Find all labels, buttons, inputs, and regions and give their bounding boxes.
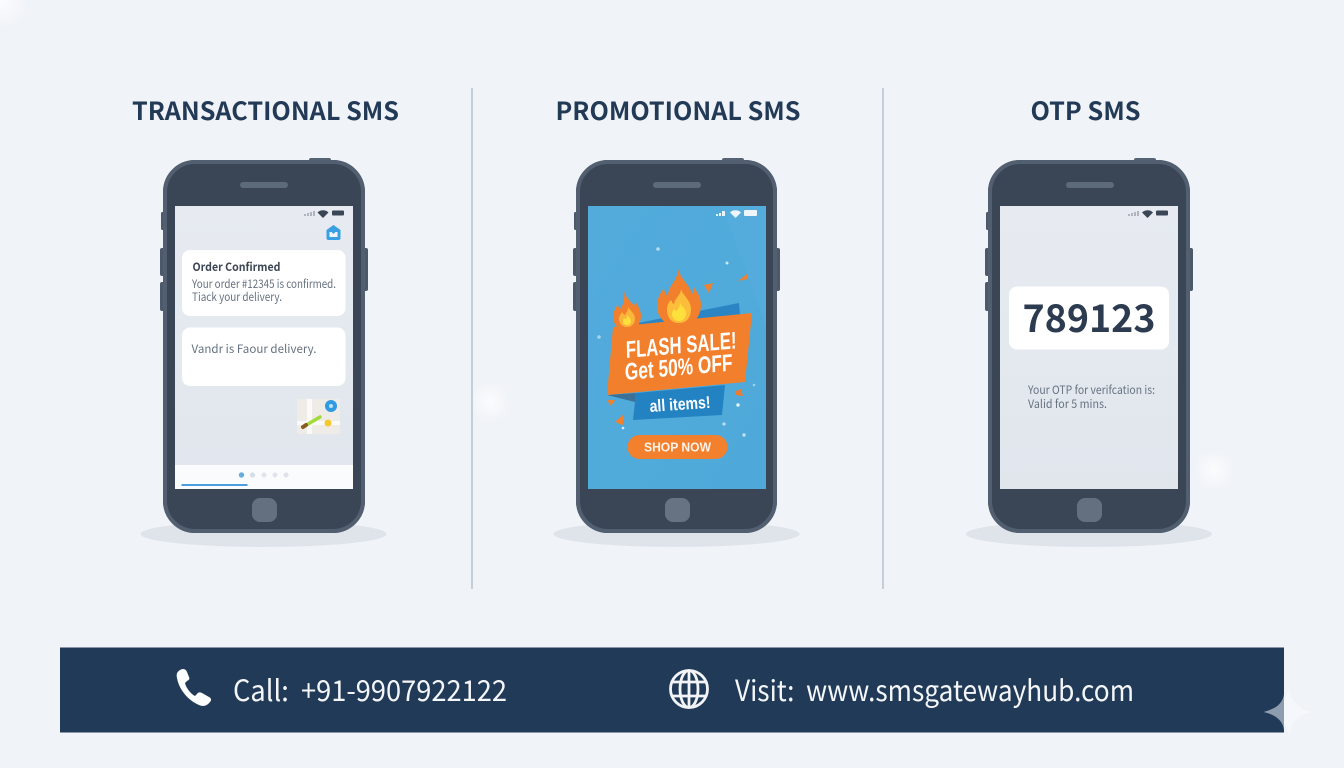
- phone shadow: [554, 521, 800, 547]
- status bar icons: [304, 210, 344, 218]
- button: shop now: SHOP NOW: [644, 440, 712, 454]
- call text: Call: +91-9907922122: [233, 668, 507, 710]
- promo text: all items!: [649, 393, 711, 416]
- panel: transactional SMS: [132, 92, 399, 547]
- button: shop now: [628, 435, 728, 459]
- status bar icons: [716, 210, 757, 218]
- icon: inbox badge: [326, 225, 340, 240]
- message card: order confirmed: [182, 250, 346, 316]
- message card: delivery: [182, 328, 346, 386]
- phone shadow: [140, 521, 386, 547]
- screen: [175, 206, 353, 489]
- phone body: [573, 158, 780, 533]
- carousel dots: [182, 472, 288, 486]
- OTP message: Valid for 5 mins.: [1028, 396, 1107, 412]
- ribbon: orange flash sale: [607, 313, 752, 395]
- phone body: [160, 158, 368, 533]
- phone body: [985, 158, 1193, 533]
- heading: promotional: PROMOTIONAL SMS: [556, 92, 800, 128]
- icon: phone: [177, 669, 211, 706]
- ribbon back: blue lower: [633, 385, 725, 420]
- panel: promotional SMS: [554, 92, 800, 547]
- decorative sparkle: [1264, 687, 1311, 736]
- ribbon back: blue upper: [638, 303, 740, 327]
- OTP message: [1027, 382, 1155, 412]
- icon: delivery map: [297, 399, 340, 434]
- confetti: [597, 247, 755, 437]
- screen: [1000, 206, 1178, 489]
- phone shadow: [966, 521, 1212, 547]
- message card: order confirmed: Order Confirmed: [192, 259, 280, 275]
- message card: order confirmed: Tiack your delivery.: [192, 289, 282, 305]
- heading: transactional: TRANSACTIONAL SMS: [132, 92, 399, 128]
- contact bar: [60, 648, 1284, 732]
- OTP message: Your OTP for verifcation is:: [1027, 382, 1155, 398]
- message card: delivery: Vandr is Faour delivery.: [192, 341, 316, 357]
- status bar icons: [1128, 210, 1168, 218]
- screen: [588, 206, 766, 489]
- message card: order confirmed: Your order #12345 is confirmed.: [191, 276, 336, 292]
- flame: small: [613, 291, 641, 331]
- icon: globe: [670, 670, 708, 708]
- promo text: [625, 327, 737, 416]
- visit text: Visit: www.smsgatewayhub.com: [735, 668, 1134, 710]
- promo text: FLASH SALE!: [626, 327, 737, 364]
- OTP code card: 789123: [1022, 288, 1156, 343]
- heading: OTP: OTP SMS: [1030, 92, 1140, 128]
- ribbon fold: [607, 393, 636, 402]
- panel: OTP SMS: [966, 92, 1212, 547]
- promo text: Get 50% OFF: [625, 350, 733, 386]
- flame: large: [657, 269, 701, 327]
